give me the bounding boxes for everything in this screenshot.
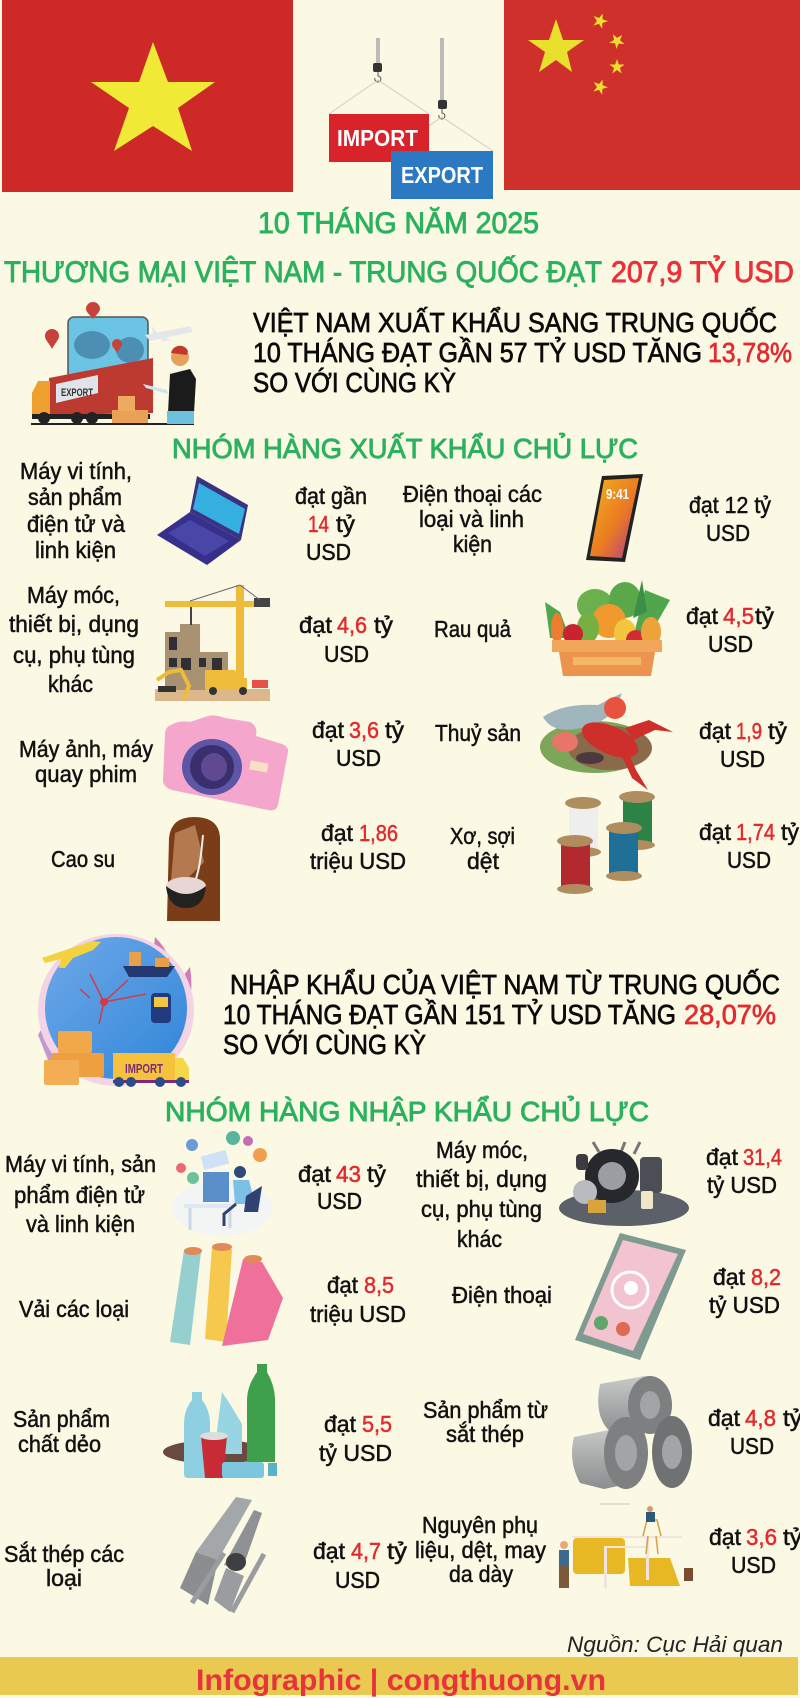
label: plastic products: Sản phẩm [13, 1406, 110, 1432]
heading: total trade: 207,9 TỶ USD [611, 255, 794, 289]
icon: construction site with crane [155, 585, 270, 701]
value: seafood: đạt [699, 718, 732, 744]
label: phones export [403, 481, 542, 557]
value: computers import: tỷ [367, 1161, 387, 1187]
label: cameras [19, 736, 153, 787]
label: seafood: Thuỷ sản [435, 720, 521, 746]
label: computers export: điện tử và [27, 511, 125, 537]
label: computers export [20, 458, 132, 563]
value: fruit and vegetables: USD [708, 631, 753, 657]
icon: export truck and worker: EXPORT [61, 387, 93, 399]
value: fabrics: triệu USD [310, 1301, 406, 1327]
label: fibers: Xơ, sợi [450, 823, 515, 849]
footer bar: Infographic | congthuong.vn [196, 1664, 606, 1697]
label: plastic products: chất dẻo [18, 1431, 101, 1457]
icon: plastic bottles [163, 1364, 277, 1478]
heading: main export groups: NHÓM HÀNG XUẤT KHẨU CHỦ LỰC [172, 432, 638, 464]
label: phones export: Điện thoại các [403, 481, 542, 507]
value: steel: tỷ [387, 1538, 408, 1564]
value: rubber [310, 820, 406, 874]
value: cameras: 3,6 [349, 717, 379, 743]
label: textile materials: liệu, dệt, may [415, 1537, 546, 1563]
value: fruit and vegetables: tỷ [755, 603, 775, 629]
value: rubber: 1,86 [359, 820, 398, 846]
label: machinery import [416, 1137, 547, 1252]
text: export summary: 13,78% [708, 337, 792, 368]
label: phones export: kiện [453, 531, 492, 557]
value: phones import: tỷ USD [709, 1292, 780, 1318]
value: computers import: 43 [336, 1161, 361, 1187]
value: cameras: USD [336, 745, 381, 771]
label: machinery export: khác [48, 671, 93, 697]
value: fabrics: đạt [327, 1272, 359, 1298]
label: steel: Sắt thép các [4, 1541, 124, 1567]
footer bar [0, 1657, 798, 1697]
label: textile materials: Nguyên phụ [422, 1512, 538, 1538]
value: seafood: USD [720, 746, 765, 772]
value: textile materials: 3,6 [746, 1524, 777, 1550]
label: fabrics: Vải các loại [19, 1296, 129, 1322]
value: computers import: USD [317, 1188, 362, 1214]
value: cameras: tỷ [385, 717, 405, 743]
label: computers export: linh kiện [35, 537, 116, 563]
label: computers export: sản phẩm [28, 484, 122, 510]
value: steel: USD [335, 1567, 380, 1593]
label: fibers: dệt [467, 848, 500, 874]
label: cameras: Máy ảnh, máy [19, 736, 153, 762]
value: computers export: 14 [308, 511, 329, 537]
icon: basket of vegetables [545, 580, 670, 676]
icon: person at computer desk [172, 1131, 272, 1236]
value: machinery export: 4,6 [337, 612, 367, 638]
label: computers import [5, 1151, 156, 1237]
label: machinery import: thiết bị, dụng [416, 1166, 547, 1192]
text: import summary [223, 968, 780, 1060]
label: textile materials: da dày [449, 1561, 513, 1587]
icon: globe with import logistics: IMPORT [125, 1061, 163, 1076]
label: phones export: loại và linh [419, 506, 524, 532]
label: machinery import: Máy móc, [436, 1137, 528, 1163]
label: steel products: sắt thép [446, 1421, 524, 1447]
icon: smartphone: 9:41 [606, 486, 629, 503]
value: computers export: tỷ [336, 511, 356, 537]
value: computers export: đạt gần [295, 483, 367, 509]
text: import summary: 28,07% [684, 999, 776, 1030]
heading: total trade: THƯƠNG MẠI VIỆT NAM - TRUNG QUỐC ĐẠT [4, 255, 602, 289]
icon: globe with import logistics [38, 934, 194, 1087]
value: steel: 4,7 [351, 1538, 381, 1564]
label: machinery import: khác [457, 1226, 502, 1252]
value: fibers: tỷ [781, 819, 800, 845]
label: plastic products [13, 1406, 110, 1457]
icon: seafood plate with lobster [540, 693, 673, 790]
value: cameras: đạt [312, 717, 345, 743]
value: computers export [295, 483, 367, 565]
label: computers export: Máy vi tính, [20, 458, 132, 484]
value: steel products [708, 1405, 800, 1459]
value: machinery export [299, 612, 394, 667]
icon: steel coils [572, 1376, 692, 1489]
icon: import export containers on crane hooks: EXPORT [401, 162, 483, 188]
value: machinery export: USD [324, 641, 369, 667]
value: fibers: USD [727, 847, 771, 873]
value: fibers: 1,74 [736, 819, 775, 845]
value: phones import: 8,2 [751, 1264, 781, 1290]
icon: car parts on platform [559, 1142, 689, 1226]
label: phones import: Điện thoại [452, 1282, 552, 1308]
value: fruit and vegetables [686, 603, 775, 657]
icon: export truck and worker [31, 302, 196, 425]
label: steel products: Sản phẩm từ [423, 1397, 548, 1423]
value: phones import: đạt [713, 1264, 746, 1290]
value: machinery import: đạt [706, 1144, 739, 1170]
icon: phone call screen [575, 1233, 686, 1360]
icon: laptop [157, 476, 248, 565]
value: seafood: 1,9 [736, 718, 762, 744]
value: computers export: USD [306, 539, 351, 565]
value: cameras [312, 717, 405, 771]
label: rubber: Cao su [51, 846, 115, 872]
text: import summary: 10 THÁNG ĐẠT GẦN 151 TỶ USD TĂNG [223, 998, 676, 1030]
value: seafood [699, 718, 788, 772]
text: export summary: 10 THÁNG ĐẠT GẦN 57 TỶ USD TĂNG [253, 336, 702, 368]
icon: import export containers on crane hooks: IMPORT [337, 125, 418, 151]
value: textile materials: USD [731, 1552, 776, 1578]
value: plastic products [319, 1411, 392, 1466]
value: rubber: triệu USD [310, 848, 406, 874]
value: plastic products: tỷ USD [319, 1440, 392, 1466]
value: machinery import [706, 1144, 782, 1198]
icon: fabric rolls [170, 1243, 283, 1346]
icon: thread spools [557, 791, 655, 894]
flag: Vietnam [2, 0, 293, 192]
value: plastic products: 5,5 [362, 1411, 392, 1437]
value: plastic products: đạt [324, 1411, 357, 1437]
value: machinery import: 31,4 [743, 1144, 782, 1170]
text: import summary: SO VỚI CÙNG KỲ [223, 1029, 426, 1060]
label: textile materials [415, 1512, 546, 1587]
value: phones export [689, 492, 771, 546]
label: machinery export [9, 582, 139, 697]
value: steel products: 4,8 [745, 1405, 776, 1431]
value: fruit and vegetables: đạt [686, 603, 719, 629]
label: fibers [450, 823, 515, 874]
label: steel products [423, 1397, 548, 1447]
value: steel: đạt [313, 1538, 346, 1564]
value: computers import: đạt [298, 1161, 332, 1187]
value: textile materials [709, 1524, 800, 1578]
value: rubber: đạt [321, 820, 354, 846]
label: machinery import: cụ, phụ tùng [421, 1196, 542, 1222]
label: computers import: Máy vi tính, sản [5, 1151, 156, 1177]
value: seafood: tỷ [768, 718, 788, 744]
value: phones import [709, 1264, 781, 1318]
value: fruit and vegetables: 4,5 [723, 603, 754, 629]
label: steel [4, 1541, 124, 1591]
icon: textile factory workers [559, 1503, 693, 1588]
icon: steel bars and pipes [180, 1497, 264, 1612]
text: export summary [253, 306, 792, 398]
value: machinery import: tỷ USD [707, 1172, 777, 1198]
heading: 10 tháng năm 2025: 10 THÁNG NĂM 2025 [258, 207, 539, 240]
label: steel: loại [46, 1565, 82, 1591]
value: phones export: USD [706, 520, 750, 546]
value: phones export: đạt 12 tỷ [689, 492, 771, 518]
label: machinery export: Máy móc, [27, 582, 120, 608]
value: textile materials: đạt [709, 1524, 742, 1550]
value: computers import [298, 1161, 387, 1214]
source note: Nguồn: Cục Hải quan [567, 1632, 783, 1657]
value: fabrics: 8,5 [364, 1272, 394, 1298]
value: steel products: đạt [708, 1405, 741, 1431]
label: machinery export: thiết bị, dụng [9, 611, 139, 637]
flag: China [504, 0, 800, 190]
label: computers import: và linh kiện [26, 1211, 135, 1237]
text: export summary: SO VỚI CÙNG KỲ [253, 367, 456, 398]
value: steel products: USD [730, 1433, 774, 1459]
value: machinery export: đạt [299, 612, 333, 638]
value: steel [313, 1538, 408, 1593]
icon: smartphone [586, 474, 643, 562]
value: fibers: đạt [699, 819, 732, 845]
value: machinery export: tỷ [374, 612, 394, 638]
icon: pink camera [163, 715, 288, 810]
icon: import export containers on crane hooks [329, 38, 493, 199]
label: computers import: phẩm điện tử [14, 1182, 145, 1208]
value: fabrics [310, 1272, 406, 1327]
label: cameras: quay phim [35, 761, 137, 787]
value: fibers [699, 819, 800, 873]
label: machinery export: cụ, phụ tùng [13, 642, 135, 668]
label: fruit and vegetables: Rau quả [434, 616, 511, 642]
icon: rubber tree [166, 817, 220, 921]
heading: main import groups: NHÓM HÀNG NHẬP KHẨU CHỦ LỰC [165, 1095, 649, 1127]
